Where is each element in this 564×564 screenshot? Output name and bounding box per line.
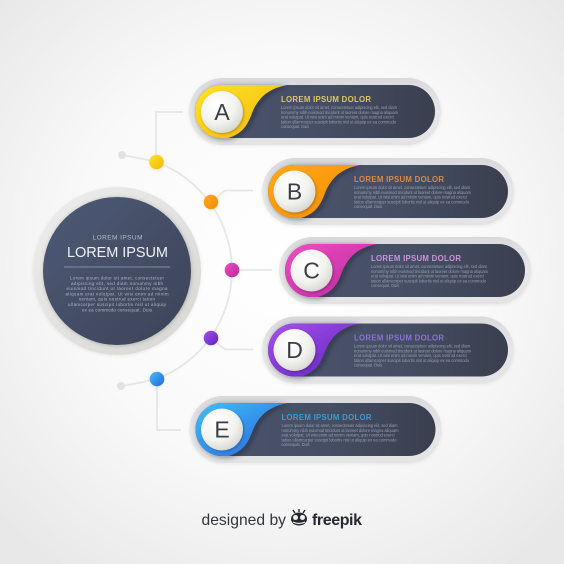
letter badge C [290, 250, 332, 292]
body C: tation ullamcorper suscipit lobortis nisl ut aliquip ex ea commodo [371, 278, 487, 283]
central body text: ex ea commodo consequat. Duis [82, 307, 153, 312]
body A: tation ullamcorper suscipit lobortis nisl ut aliquip ex ea commodo [281, 119, 397, 124]
body E: consequat. Duis [282, 442, 310, 447]
title A: LOREM IPSUM DOLOR [281, 95, 371, 104]
letter badge A [201, 91, 243, 133]
body C: erat volutpat. Ut wisi enim ad minim veniam, quis nostrud exerci [371, 274, 484, 279]
letter badge B: B [287, 178, 302, 204]
body A: erat volutpat. Ut wisi enim ad minim veniam, quis nostrud exerci [281, 115, 394, 120]
title B: LOREM IPSUM DOLOR [354, 175, 444, 184]
body E [282, 423, 399, 447]
panel: A [189, 78, 441, 145]
body D: Lorem ipsum dolor sit amet, consectetuer adipiscing elit, sed diam [354, 344, 471, 349]
letter badge B [274, 170, 316, 212]
central kicker: LOREM IPSUM [92, 234, 142, 241]
body B [354, 185, 472, 209]
letter badge E: E [214, 416, 230, 442]
letter badge E [201, 408, 243, 450]
marker dot: orange [204, 195, 218, 209]
panel: D [262, 316, 514, 384]
body B: erat volutpat. Ut wisi enim ad minim veniam, quis nostrud exerci [354, 195, 467, 200]
footer credit: designed by [202, 512, 286, 529]
body B: Lorem ipsum dolor sit amet, consectetuer adipiscing elit, sed diam [354, 185, 471, 190]
title D: LOREM IPSUM DOLOR [354, 333, 444, 342]
footer credit: freepik [312, 512, 362, 529]
letter badge D [274, 329, 316, 371]
body E: erat volutpat. Ut wisi enim ad minim veniam, quis nostrud exerci [282, 433, 395, 438]
connector lines and arc [122, 112, 272, 430]
body C: Lorem ipsum dolor sit amet, consectetuer adipiscing elit, sed diam [371, 264, 488, 269]
body B: nonummy nibh euismod tincidunt ut laoreet dolore magna aliquam [354, 190, 472, 195]
central body text: veniam, quis nostrud exerci tation [79, 297, 156, 302]
body D: tation ullamcorper suscipit lobortis nisl ut aliquip ex ea commodo [354, 358, 470, 363]
title C: LOREM IPSUM DOLOR [371, 254, 461, 263]
marker dot: purple [204, 331, 218, 345]
icon: freepik mascot [291, 509, 307, 526]
body E: Lorem ipsum dolor sit amet, consectetuer adipiscing elit, sed diam [282, 423, 398, 428]
title E: LOREM IPSUM DOLOR [282, 413, 372, 422]
footer credit [202, 509, 362, 529]
arc end dot [117, 382, 125, 390]
body D [354, 344, 472, 368]
marker dot: blue [150, 372, 164, 386]
central body text: Lorem ipsum dolor sit amet, consectetuer [70, 276, 165, 280]
central heading: LOREM IPSUM [67, 245, 168, 261]
panel: central circle [33, 187, 201, 355]
marker dot: magenta [225, 263, 239, 277]
central body text: aliquam erat volutpat. Ut wisi enim ad minim [66, 291, 169, 296]
central body text: adipiscing elit, sed diam nonummy nibh [71, 281, 164, 286]
body B: tation ullamcorper suscipit lobortis nisl ut aliquip ex ea commodo [354, 199, 470, 204]
body C: nonummy nibh euismod tincidunt ut laoreet dolore magna aliquam [371, 269, 489, 274]
letter badge D: D [286, 337, 303, 363]
arc start dot [118, 151, 126, 159]
panel: C [279, 237, 531, 304]
body D: nonummy nibh euismod tincidunt ut laoreet dolore magna aliquam [354, 348, 472, 353]
body D: erat volutpat. Ut wisi enim ad minim veniam, quis nostrud exerci [354, 353, 467, 358]
body B: consequat. Duis [354, 204, 382, 209]
body A: Lorem ipsum dolor sit amet, consectetuer adipiscing elit, sed diam [281, 105, 398, 110]
letter badge C: C [303, 258, 320, 284]
body A [281, 105, 399, 129]
body C: consequat. Duis [371, 283, 399, 288]
letter badge A: A [214, 99, 230, 125]
body A: consequat. Duis [281, 124, 309, 129]
panel: B [262, 158, 514, 225]
body A: nonummy nibh euismod tincidunt ut laoreet dolore magna aliquam [281, 110, 399, 115]
body E: nonummy nibh euismod tincidunt ut laoreet dolore magna aliquam [282, 428, 399, 433]
body D: consequat. Duis [354, 362, 382, 368]
body C [371, 264, 489, 288]
marker dot: yellow [149, 155, 164, 169]
central body text [66, 276, 169, 312]
central body text: euismod tincidunt ut laoreet dolore magna [66, 286, 168, 291]
body E: tation ullamcorper suscipit lobortis nisl ut aliquip ex ea commodo [282, 437, 397, 442]
panel: E [190, 396, 442, 463]
central body text: ullamcorper suscipit lobortis nisl ut aliquip [68, 302, 167, 307]
